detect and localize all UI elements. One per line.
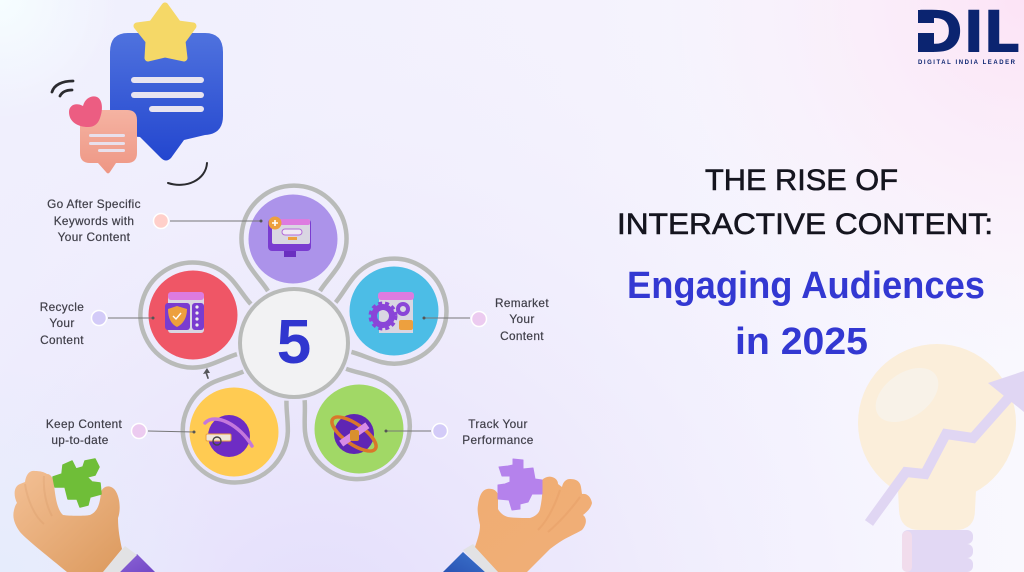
callout: Recycle Your Content: Content <box>40 333 84 347</box>
icon: heart <box>69 96 102 127</box>
icon: planet search <box>205 415 252 457</box>
callout: Go After Specific Keywords: Your Content <box>58 230 131 244</box>
icon: light bulb with rising arrow <box>858 344 1024 572</box>
icon: large blue speech bubble <box>110 33 223 160</box>
icon: bubble lines <box>131 77 204 112</box>
puzzle piece <box>498 459 542 510</box>
sleeve <box>120 554 155 572</box>
heading: The Rise of Interactive Content: INTERACTIVE CONTENT: <box>617 208 993 241</box>
heading: The Rise of Interactive Content <box>617 164 993 241</box>
callout: Keep Content up-to-date: up-to-date <box>51 433 109 447</box>
puzzle piece <box>53 459 101 507</box>
heading: Engaging Audiences in 2025: in 2025 <box>735 321 868 363</box>
callout: Keep Content up-to-date: Keep Content <box>46 417 123 431</box>
icon: salmon bubble lines <box>89 134 125 152</box>
callout: Track Your Performance <box>384 417 534 447</box>
icon: gears window <box>370 292 414 333</box>
heading: Engaging Audiences in 2025: Engaging Audiences <box>627 265 985 307</box>
finger creases <box>25 476 52 524</box>
logo: Digital India Leader: DIL <box>915 0 1020 66</box>
illustration: left hand with green puzzle piece <box>13 459 155 572</box>
icon: swoosh arc <box>168 163 207 185</box>
illustration: chat bubbles with star and heart <box>52 6 223 185</box>
sleeve <box>443 552 485 572</box>
finger creases <box>538 490 580 532</box>
icon: salmon speech bubble <box>80 110 137 174</box>
petal outlines <box>128 186 460 503</box>
petal: right blue <box>350 266 438 356</box>
callout: Recycle Your Content: Recycle <box>40 300 84 314</box>
illustration: right hand with purple puzzle piece <box>443 459 592 572</box>
petal: bottom-left yellow <box>190 388 278 476</box>
logo: Digital India Leader: DIGITAL INDIA LEADER <box>918 60 1016 66</box>
icon: monitor <box>268 216 311 257</box>
icon: swoosh marks <box>52 81 73 96</box>
callout: Go After Specific Keywords: Keywords with <box>54 214 134 228</box>
callout: Go After Specific Keywords <box>47 197 262 244</box>
icon: star <box>137 6 193 58</box>
heading: Engaging Audiences in 2025 <box>627 265 985 363</box>
callout: Remarket Your Content: Your <box>509 312 535 326</box>
callout: Recycle Your Content: Your <box>49 316 75 330</box>
callout: Recycle Your Content <box>40 300 154 347</box>
icon: small cursor arrow <box>203 368 210 379</box>
callout: Remarket Your Content: Content <box>500 329 544 343</box>
callout: Track Your Performance: Track Your <box>468 417 528 431</box>
icon: shield window <box>165 292 204 333</box>
hand <box>475 477 592 572</box>
heading: The Rise of Interactive Content: THE RISE OF <box>705 164 898 197</box>
cuff <box>103 546 137 572</box>
hand <box>13 471 122 572</box>
callout: Go After Specific Keywords: Go After Specific <box>47 197 141 211</box>
icon: planet satellite <box>327 411 381 457</box>
center circle with number: 5 <box>277 308 311 377</box>
callout: Remarket Your Content: Remarket <box>495 296 549 310</box>
diagram: five-petal flower <box>128 186 460 503</box>
center circle with number <box>240 289 348 397</box>
callout: Remarket Your Content <box>422 296 549 343</box>
cuff <box>463 544 498 572</box>
petal: bottom-right green <box>314 384 404 474</box>
petal: left red <box>148 270 238 360</box>
callout: Keep Content up-to-date <box>46 417 196 447</box>
petal: top purple <box>248 194 338 284</box>
callout: Track Your Performance: Performance <box>462 433 534 447</box>
